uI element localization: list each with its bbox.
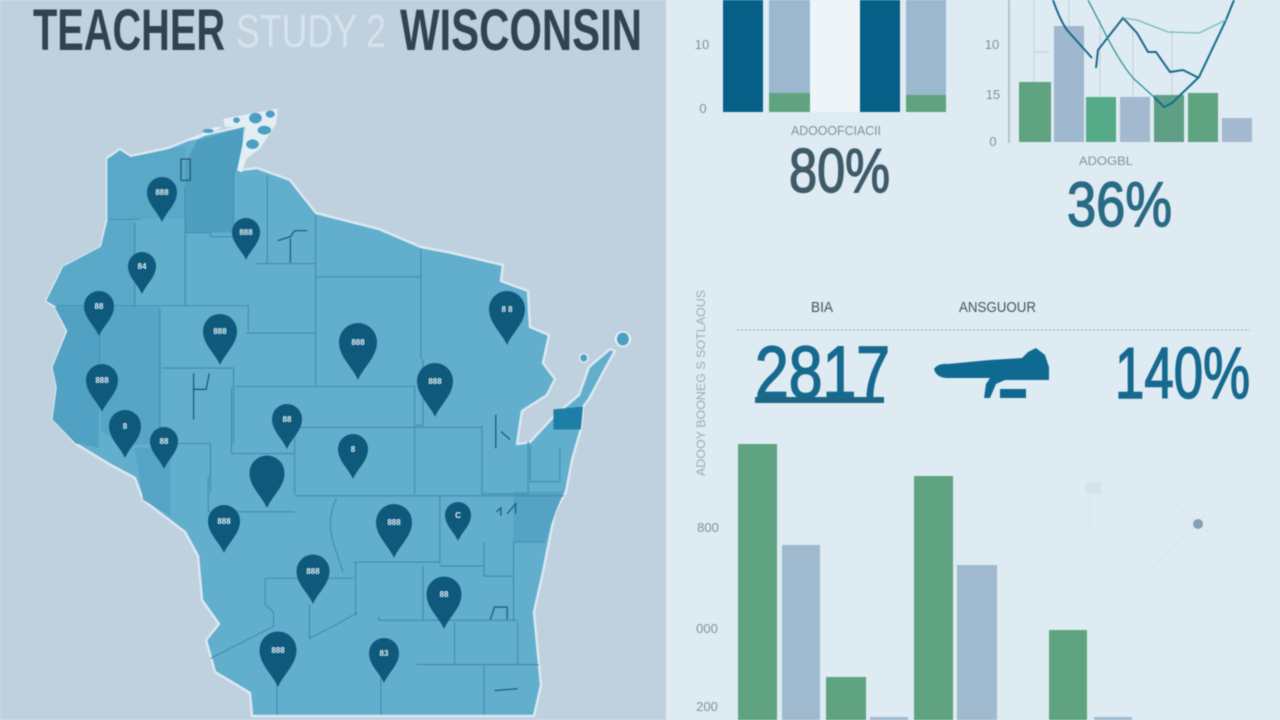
pin 16: 888 — [387, 518, 401, 527]
pin 1: 888 — [155, 188, 169, 197]
pin 4 — [84, 291, 114, 336]
pin 21 — [369, 638, 399, 683]
pin 5: 888 — [213, 327, 227, 336]
pin 15: 888 — [217, 517, 231, 526]
decorative faint network marker — [1086, 480, 1232, 625]
pin 6 — [339, 323, 377, 380]
pin 3: 84 — [138, 262, 147, 271]
pin 9: 888 — [95, 376, 109, 385]
pin 20: 888 — [271, 646, 285, 655]
title: STUDY 2 — [236, 5, 386, 57]
axis title: rotated: ADOOY BOONEG S SOTLAOUS — [694, 290, 708, 476]
pin 19 — [426, 576, 462, 629]
pin 12: 88 — [283, 415, 292, 424]
pin 4: 88 — [95, 302, 104, 311]
pin 15 — [208, 505, 240, 553]
pin 9 — [86, 364, 118, 412]
pin 11 — [150, 427, 178, 469]
pin 2 — [232, 218, 260, 260]
pin 8: 888 — [428, 377, 442, 386]
pin 13: 8 — [351, 445, 356, 454]
label: second statistic caption: ADOGBL — [1079, 154, 1133, 168]
pin 1 — [147, 177, 177, 222]
pin 17: C — [455, 511, 461, 520]
label: ANSGUOUR: ANSGUOUR — [959, 299, 1036, 316]
pin 18 — [296, 554, 330, 604]
icon: pointing hand — [934, 348, 1049, 398]
pin 7: 8 8 — [501, 305, 513, 314]
label: first statistic caption: ADOOOFCIACII — [791, 123, 881, 138]
combo chart: bars and lines — [985, 0, 1252, 149]
panel: right charts background — [666, 0, 1280, 720]
map: Wisconsin counties — [46, 108, 631, 716]
pin 10 — [109, 410, 141, 458]
pin 18: 888 — [306, 567, 320, 576]
stat: 80%: 80% — [789, 137, 890, 206]
stat: 2817: 2817 — [755, 331, 890, 414]
pin 3 — [128, 252, 156, 294]
pin 2: 888 — [239, 228, 253, 237]
pin 17 — [445, 502, 471, 541]
bar chart: top left — [695, 0, 946, 116]
bar chart: bottom: 800 — [697, 520, 719, 535]
panel: left map background — [0, 0, 666, 720]
map: shaded counties, islands and borders — [46, 108, 631, 715]
bar chart: top left: 0 — [699, 101, 707, 116]
combo chart: bars and lines: 0 — [989, 134, 997, 149]
pin 20 — [260, 632, 296, 687]
pin 21: 83 — [380, 649, 389, 658]
label: BIA: BIA — [811, 299, 833, 316]
combo chart: bars and lines: 10 — [985, 37, 999, 52]
dotted divider — [737, 329, 1250, 331]
pin 5 — [203, 314, 237, 365]
bar chart: bottom — [696, 444, 1132, 720]
pin 11: 88 — [160, 437, 169, 446]
pin 6: 888 — [351, 338, 365, 347]
bar chart: bottom: 000 — [696, 621, 718, 636]
pin 19: 88 — [440, 590, 449, 599]
pin 16 — [376, 504, 412, 558]
pin 10: 8 — [123, 422, 128, 431]
bar chart: bottom: 200 — [696, 699, 718, 714]
pin 7 — [489, 291, 525, 345]
pin 8 — [417, 363, 453, 417]
title — [33, 0, 642, 63]
map: state outline — [46, 126, 615, 716]
pin 12 — [272, 404, 302, 449]
combo chart: bars and lines: 15 — [986, 87, 1000, 102]
stat: 36%: 36% — [1067, 170, 1172, 240]
pin 13 — [338, 434, 368, 479]
pin 14 — [250, 456, 284, 508]
bar chart: top left: 10 — [695, 37, 709, 52]
